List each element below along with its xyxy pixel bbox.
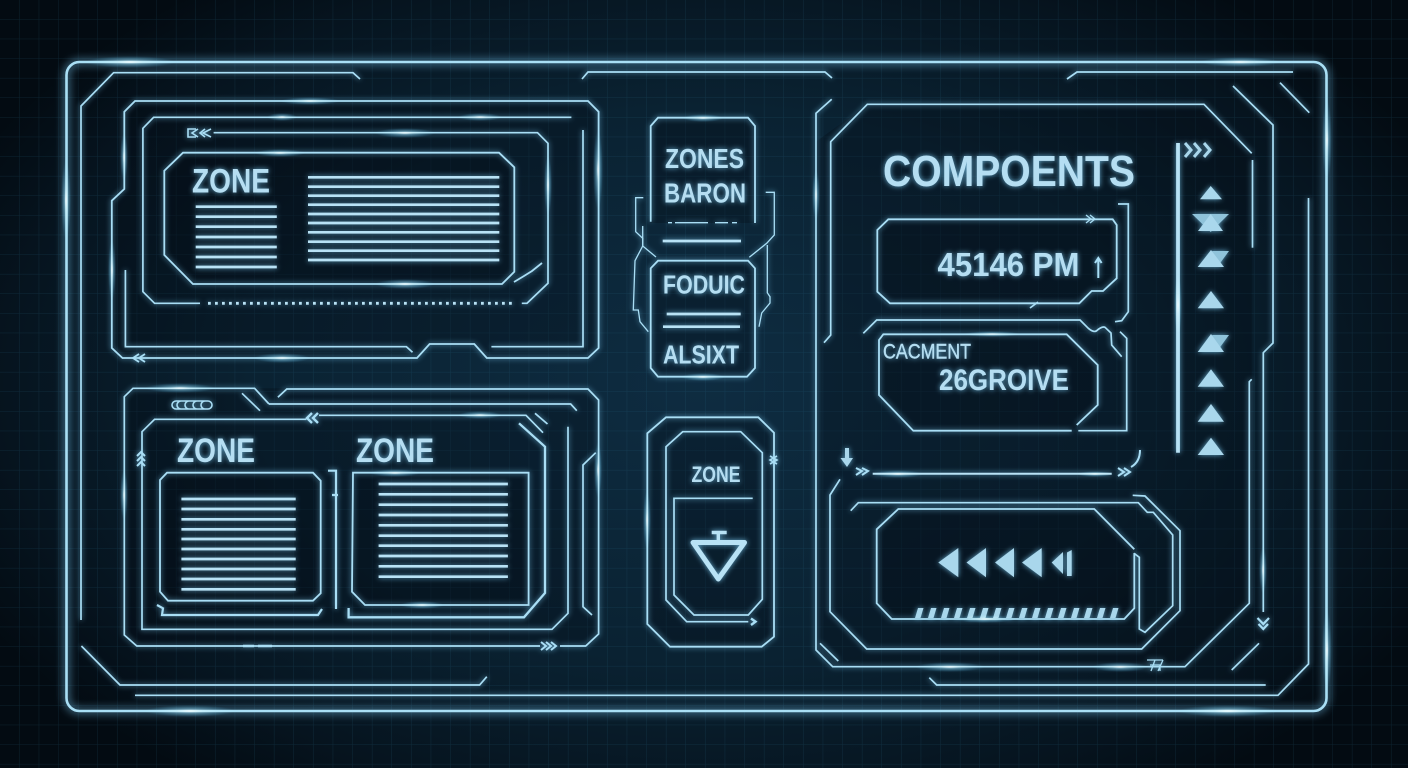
card: cacment	[863, 320, 1127, 431]
label: zones: ZONES	[665, 143, 744, 174]
icon: double chevron	[133, 354, 145, 362]
icon: center chevrons	[307, 413, 318, 423]
scribble row	[668, 222, 737, 224]
text lines: short column	[196, 207, 277, 267]
heading: zone left: ZONE	[177, 432, 255, 470]
scribble mark	[514, 263, 542, 282]
left sub-bracket	[157, 605, 322, 615]
icon: chevrons	[1086, 215, 1095, 223]
dotted progress line	[208, 302, 515, 305]
text lines: right box	[379, 484, 508, 577]
icon: small glyph	[1147, 660, 1163, 671]
inner zone box	[164, 153, 514, 284]
text: label: CACMENT	[883, 340, 971, 364]
right zone box	[352, 473, 529, 605]
label: baron: BARON	[664, 178, 746, 208]
icon: down triangle	[693, 532, 744, 579]
panel: top-left zone	[112, 101, 599, 362]
text lines: left box	[181, 499, 296, 589]
rule with markers	[840, 448, 1140, 476]
icon: down arrow	[840, 448, 853, 467]
label: foduic: FODUIC	[663, 270, 745, 300]
upper label box	[651, 118, 755, 223]
icon: up chevrons	[137, 452, 145, 466]
divider bracket	[328, 471, 338, 609]
icon: triple chevron	[541, 642, 556, 650]
heading: zone: ZONE	[192, 162, 270, 200]
outer frame	[66, 62, 1326, 711]
icon: rewind triangles	[938, 548, 1072, 577]
icon: arrow head	[751, 618, 756, 625]
icon: top glyph	[188, 129, 211, 137]
label: alsixt: ALSIXT	[663, 340, 739, 370]
panel backgrounds	[112, 101, 1252, 667]
icon: triple chevron	[1185, 143, 1210, 157]
icon: hatch mark	[770, 456, 777, 464]
panel: centre zone icon	[647, 417, 777, 647]
panel: centre stacked labels	[633, 118, 774, 377]
panel: components	[816, 99, 1269, 671]
card: time value	[877, 215, 1117, 303]
text: value: 45146 PM	[938, 246, 1080, 283]
glow highlights	[61, 56, 1332, 717]
heading: zone: ZONE	[692, 462, 740, 487]
heading: zone right: ZONE	[356, 432, 434, 470]
icon: down arrow end	[1258, 618, 1269, 629]
connectors	[633, 198, 648, 332]
icon: ring chain	[172, 401, 212, 409]
heading: components: COMPOENTS	[883, 147, 1135, 196]
lower label box	[651, 261, 755, 377]
text: value: 26GROIVE	[939, 364, 1069, 397]
card: rewind control	[830, 479, 1180, 649]
text lines: long column	[308, 177, 499, 260]
left zone box	[160, 473, 321, 601]
panel: bottom-left zones	[124, 388, 599, 650]
decorative outer circuit lines	[81, 72, 1309, 695]
icon: bottom marker	[243, 645, 272, 647]
hatch bar	[915, 608, 1118, 618]
icon: up arrow	[1095, 258, 1102, 278]
sidebar: triangle stack	[1178, 143, 1229, 455]
